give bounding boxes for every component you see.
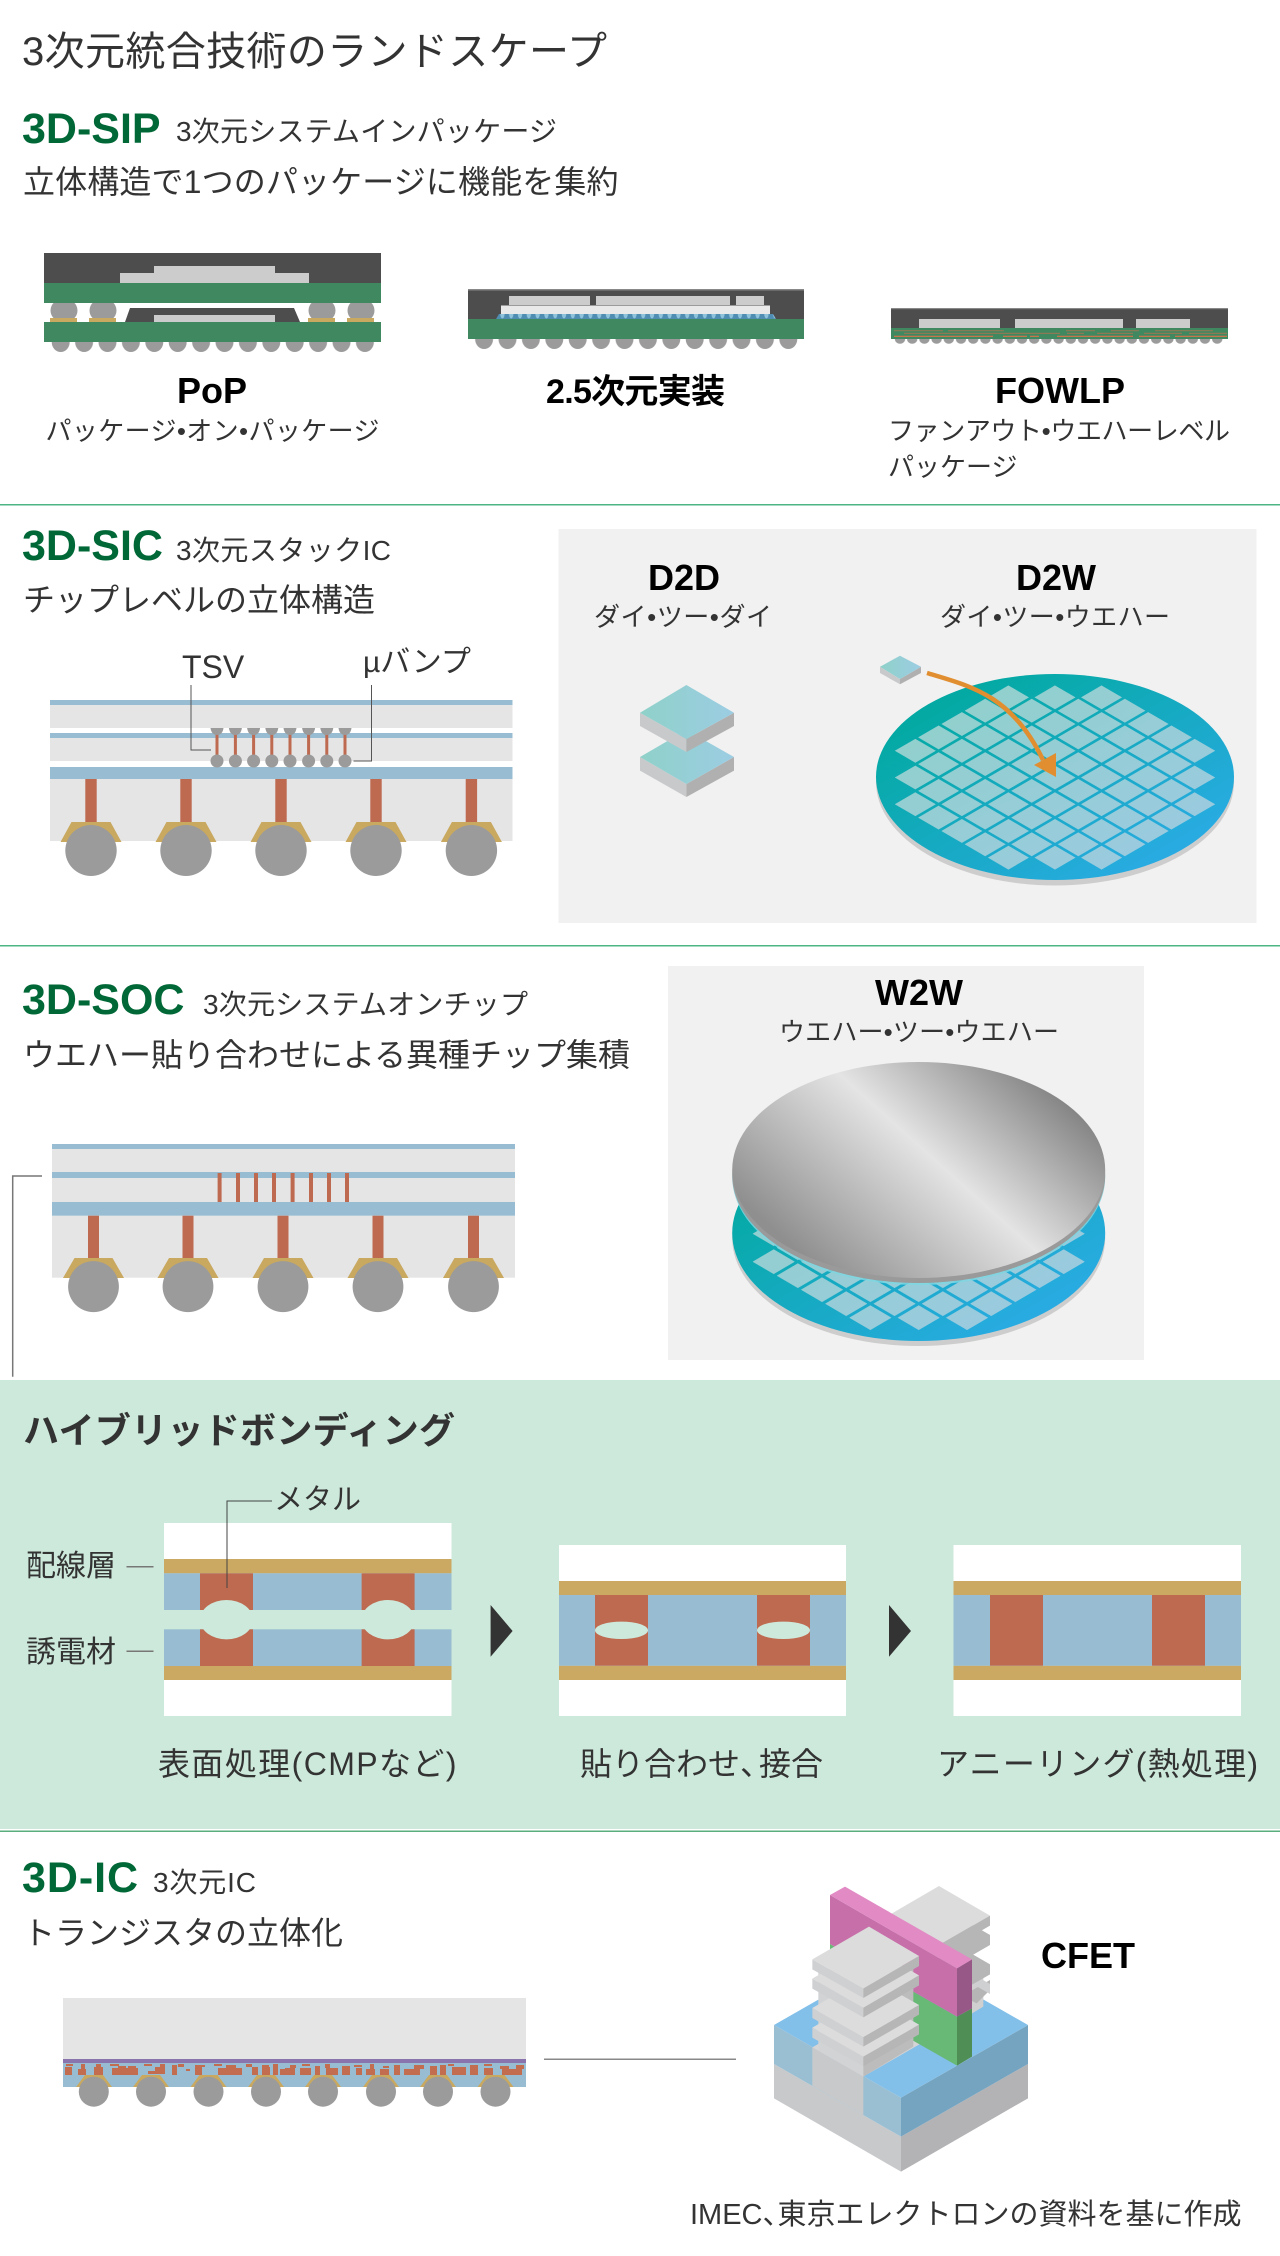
label: fan-out wafer level package: ファンアウト•ウエハーレベル — [888, 416, 1230, 446]
arrow: step 1 to 2 — [491, 1605, 513, 1657]
source note: IMEC、東京エレクトロンの資料を基に作成 — [690, 2198, 1242, 2231]
panel: 3D-IC section — [22, 1854, 1242, 2231]
label: 2.5D: 2.5次元実装 — [546, 373, 725, 411]
subheading: 3D IC: 3次元IC — [153, 1867, 256, 1898]
heading: 3D-SOC: 3D-SOC — [22, 976, 184, 1024]
label: die to wafer: ダイ•ツー•ウエハー — [940, 602, 1170, 632]
diagram: CFET transistor — [774, 1886, 1028, 2172]
diagram: 3D-IC cross-section — [63, 1998, 526, 2107]
label: die to die: ダイ•ツー•ダイ — [594, 602, 772, 632]
heading: 3D-SIP: 3D-SIP — [22, 105, 161, 153]
icon: single die — [880, 656, 921, 684]
label: D2W: D2W — [1016, 557, 1096, 598]
label: fan-out wafer level package: パッケージ — [888, 452, 1017, 482]
label: fan-out wafer level package — [888, 416, 1230, 482]
step 3: annealing — [954, 1545, 1241, 1716]
diagram: wafer bonding — [732, 1062, 1105, 1346]
label: package on package: パッケージ•オン•パッケージ — [46, 416, 380, 446]
divider — [0, 504, 1280, 506]
label: metal: メタル — [274, 1484, 361, 1516]
description: 3D-SOC: ウエハー貼り合わせによる異種チップ集積 — [23, 1037, 630, 1073]
label: W2W: W2W — [875, 972, 963, 1013]
diagram: chip stack cross-section — [50, 685, 512, 876]
heading: 3D-IC: 3D-IC — [22, 1854, 138, 1902]
label: wiring layer: 配線層 — [26, 1550, 116, 1583]
step 2: bonding — [559, 1545, 846, 1716]
heading: hybrid bonding: ハイブリッドボンディング — [23, 1410, 455, 1451]
leader line to hybrid bonding — [13, 1176, 42, 1377]
caption: annealing: アニーリング(熱処理) — [937, 1746, 1258, 1782]
diagram: PoP package — [44, 253, 381, 352]
panel: 3D-SOC section — [13, 966, 1144, 1377]
panel: 3D-SIP section — [22, 105, 1230, 482]
panel: hybrid bonding — [0, 1380, 1280, 1829]
arrow: die placed on wafer — [927, 673, 1056, 777]
arrow: step 2 to 3 — [889, 1605, 911, 1657]
panel: D2D and D2W — [558, 529, 1256, 923]
label: micro bump: µバンプ — [363, 646, 471, 679]
title: 3次元統合技術のランドスケープ — [22, 30, 607, 74]
diagram: 2.5D package — [468, 289, 804, 349]
step 1: surface treatment — [164, 1523, 452, 1716]
description: 3D-SIC: チップレベルの立体構造 — [23, 582, 375, 618]
divider — [0, 1830, 1280, 1832]
leader line to CFET — [544, 2058, 736, 2060]
label: TSV: TSV — [182, 649, 245, 685]
label: dielectric: 誘電材 — [26, 1636, 116, 1669]
label: PoP: PoP — [177, 370, 247, 411]
panel: 3D-SIC section — [22, 522, 1256, 923]
heading: 3D-SIC: 3D-SIC — [22, 522, 163, 570]
label: D2D: D2D — [648, 557, 720, 598]
label: wafer to wafer: ウエハー•ツー•ウエハー — [779, 1017, 1059, 1047]
description: 3D-SIP: 立体構造で1つのパッケージに機能を集約 — [23, 164, 618, 200]
diagram: wafer with dies — [876, 674, 1234, 886]
leader: dielectric — [126, 1650, 154, 1652]
subheading: 3D system in package: 3次元システムインパッケージ — [176, 116, 557, 147]
caption: surface treatment: 表面処理(CMPなど) — [158, 1746, 456, 1782]
leader: metal — [227, 1501, 272, 1588]
diagram: FOWLP package — [891, 308, 1228, 344]
label: FOWLP: FOWLP — [995, 370, 1125, 411]
diagram: SoC cross-section — [52, 1144, 515, 1312]
label: CFET: CFET — [1041, 1935, 1135, 1976]
subheading: 3D system on chip: 3次元システムオンチップ — [203, 989, 528, 1020]
leader: wiring layer — [126, 1566, 154, 1568]
description: 3D-IC: トランジスタの立体化 — [23, 1915, 343, 1951]
panel: W2W — [668, 966, 1144, 1360]
icon: stacked dies — [640, 685, 734, 797]
divider — [0, 945, 1280, 946]
subheading: 3D stack IC: 3次元スタックIC — [176, 535, 391, 566]
caption: bonding: 貼り合わせ、接合 — [580, 1746, 823, 1782]
